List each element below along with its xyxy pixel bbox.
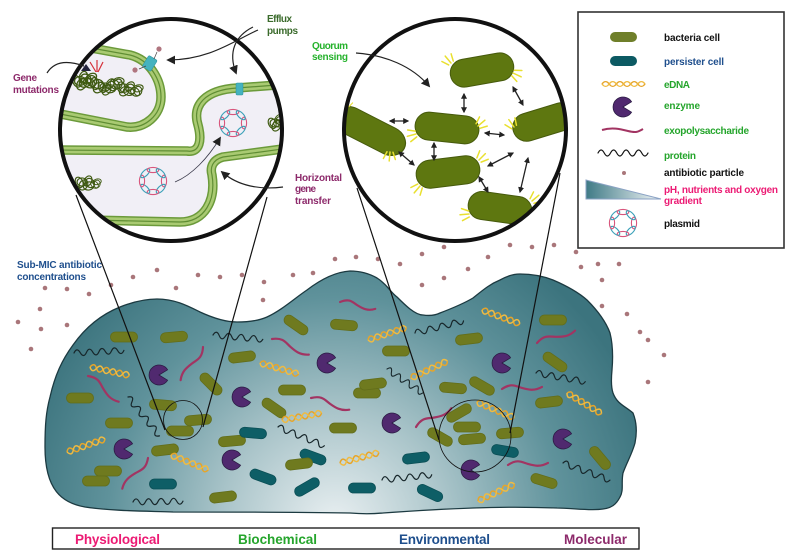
label: gene mutations: Gene [13,73,37,84]
label: horizontal gene transfer: transfer [295,196,331,207]
legend: persister cell [610,56,724,68]
persister cells in biofilm [150,427,519,503]
legend: gradient [586,180,778,207]
biofilm [45,271,636,514]
label: sub-MIC antibiotic concentrations: Sub-MIC antibiotic [17,260,102,271]
label: quorum sensing: sensing [312,52,348,63]
eDNA strands in biofilm [66,307,603,504]
legend: bacteria cell [610,32,720,44]
antibiotic particles [16,243,666,384]
legend: enzyme: enzyme [664,101,700,112]
legend: protein [598,150,696,162]
protein strands in biofilm [74,318,611,505]
label: gene mutations: mutations [13,85,59,96]
efflux pumps [142,55,243,95]
panel: gene transfer magnified view [55,19,290,241]
legend: persister cell: persister cell [664,57,724,68]
panel: quorum sensing magnified view [329,19,579,241]
bacteria [346,52,564,224]
label: sub-MIC antibiotic concentrations: concentrations [17,272,86,283]
plasmid transfer arrow [175,138,220,182]
label: horizontal gene transfer: gene [295,184,316,195]
signalling double arrows [390,87,528,192]
category: biochemical: Biochemical [238,532,317,547]
legend: protein: protein [664,151,696,162]
mutation marker [81,60,103,72]
legend: gradient: gradient [664,196,703,207]
enzymes in biofilm [114,353,572,480]
legend: gradient: pH, nutrients and oxygen [664,185,778,196]
bacteria cells in biofilm [66,313,613,504]
plasmids [139,109,247,195]
legend: antibiotic particle [622,168,744,179]
legend: eDNA: eDNA [664,80,690,91]
category: physiological: Physiological [75,532,160,547]
category bar [52,528,639,549]
callout arrows [47,27,429,188]
pump transport marks [139,52,157,69]
zoom guide lines and lens circles [76,173,560,472]
category: molecular: Molecular [564,532,628,547]
legend: eDNA [602,80,690,91]
category: environmental: Environmental [399,532,490,547]
panel: legend [578,12,784,248]
legend: plasmid [609,209,700,237]
bacterial cell walls [55,42,290,222]
antibiotic particles at pump [132,46,162,73]
exopolysaccharide strands in biofilm [87,299,576,491]
quorum signal hairs [343,52,543,221]
legend: plasmid: plasmid [664,219,700,230]
legend: enzyme [613,97,700,117]
label: efflux pumps: Efflux [267,14,292,25]
DNA tangles [71,68,288,195]
label: efflux pumps: pumps [267,26,298,37]
legend: bacteria cell: bacteria cell [664,33,720,44]
label: quorum sensing: Quorum [312,41,348,52]
legend: exopolysaccharide [602,126,749,137]
legend: exopolysaccharide: exopolysaccharide [664,126,749,137]
label: horizontal gene transfer: Horizontal [295,173,342,184]
legend: antibiotic particle: antibiotic particle [664,168,744,179]
